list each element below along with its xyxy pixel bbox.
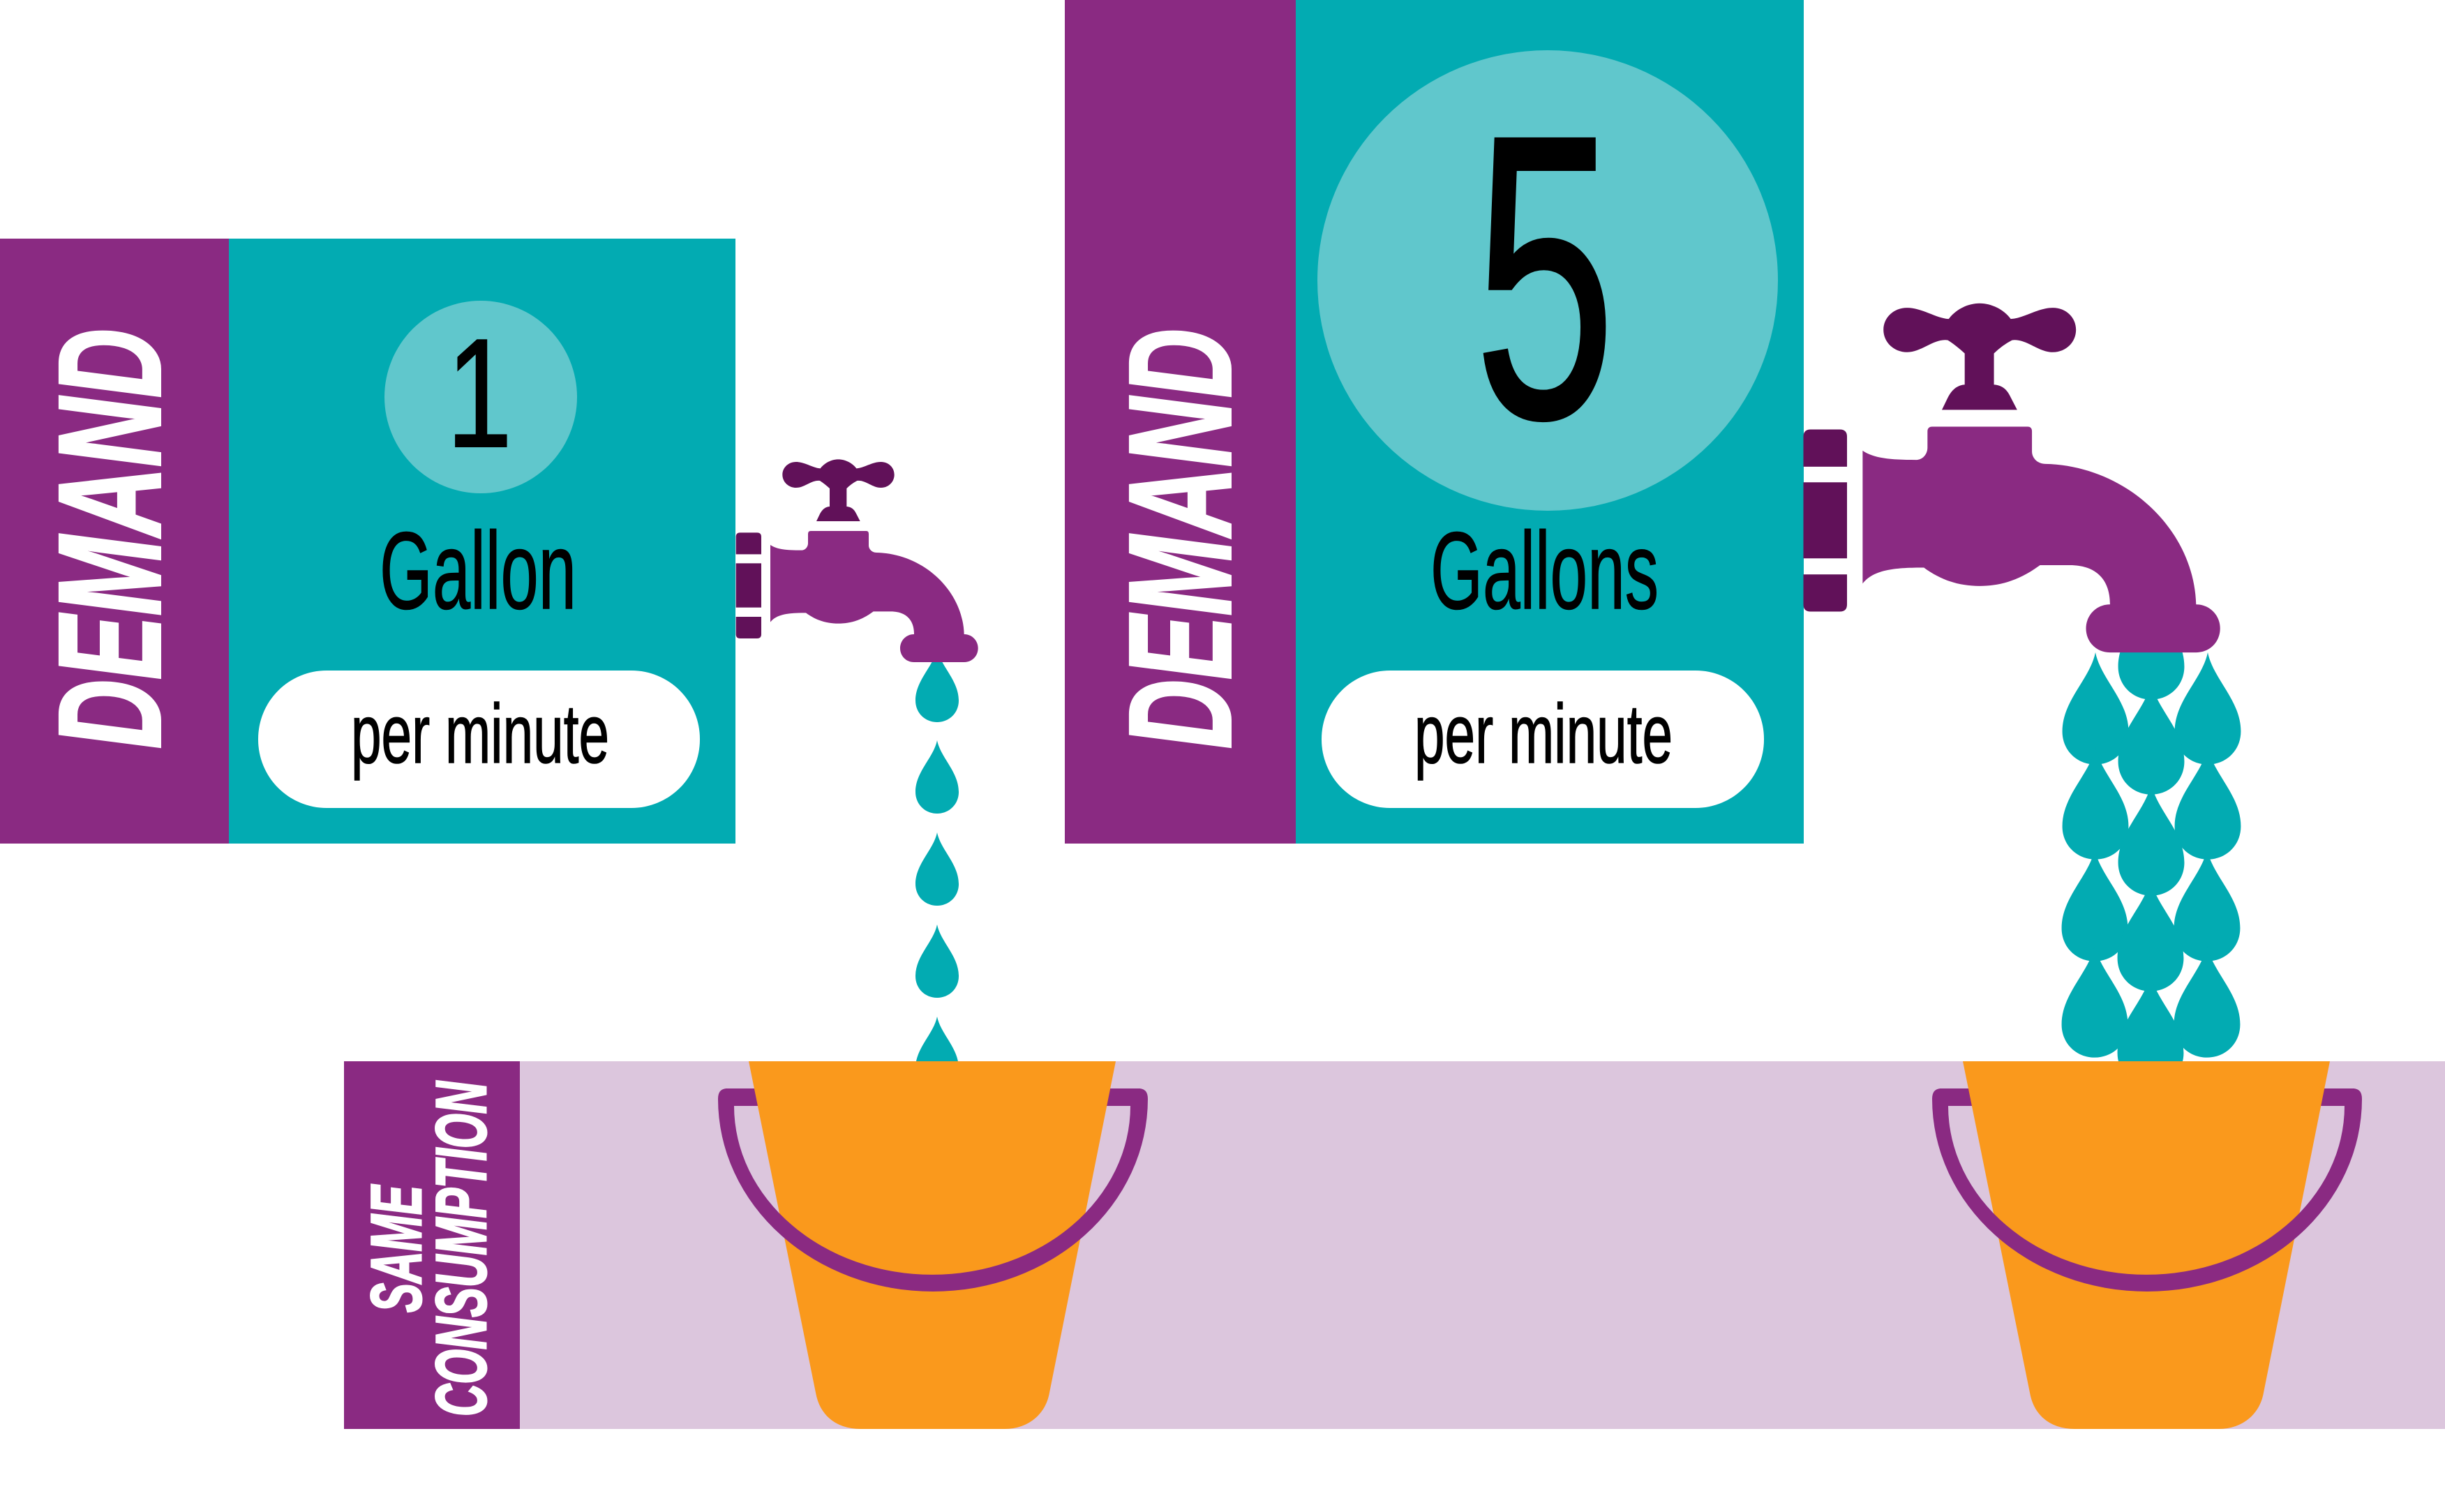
icon: left bucket [718,1061,1148,1429]
pill: per minute: per minute [1414,687,1673,781]
pill: per minute [1322,671,1764,808]
band label block [344,1061,520,1429]
label: demand: DEMAND [29,329,191,749]
label: demand: DEMAND [1100,329,1262,749]
number circle: 1: 1 [447,307,512,480]
teal block [229,239,735,844]
panel: same consumption band [344,1061,2445,1429]
panel: demand 5 gallons [1065,0,1804,844]
icon: right bucket [1932,1061,2362,1429]
unit: gallons: Gallons [1430,510,1659,632]
label: same consumption: SAME [357,1184,436,1312]
pill: per minute [258,671,700,808]
panel: demand 1 gallon [0,239,735,844]
number circle: 5 [1317,50,1778,511]
water drops: slow drip [915,649,959,1090]
water drops: heavy flow [2062,587,2241,1086]
band background [520,1061,2445,1429]
unit: gallon: Gallon [380,510,576,632]
label: same consumption [357,1081,501,1416]
teal block [1296,0,1804,844]
icon: large faucet [1803,304,2220,652]
number circle: 5: 5 [1474,52,1615,502]
icon: small faucet [736,459,978,662]
demand block [1065,0,1296,844]
pill: per minute: per minute [351,687,609,781]
number circle: 1 [384,301,577,493]
label: same consumption: CONSUMPTION [421,1081,501,1416]
demand block [0,239,229,844]
